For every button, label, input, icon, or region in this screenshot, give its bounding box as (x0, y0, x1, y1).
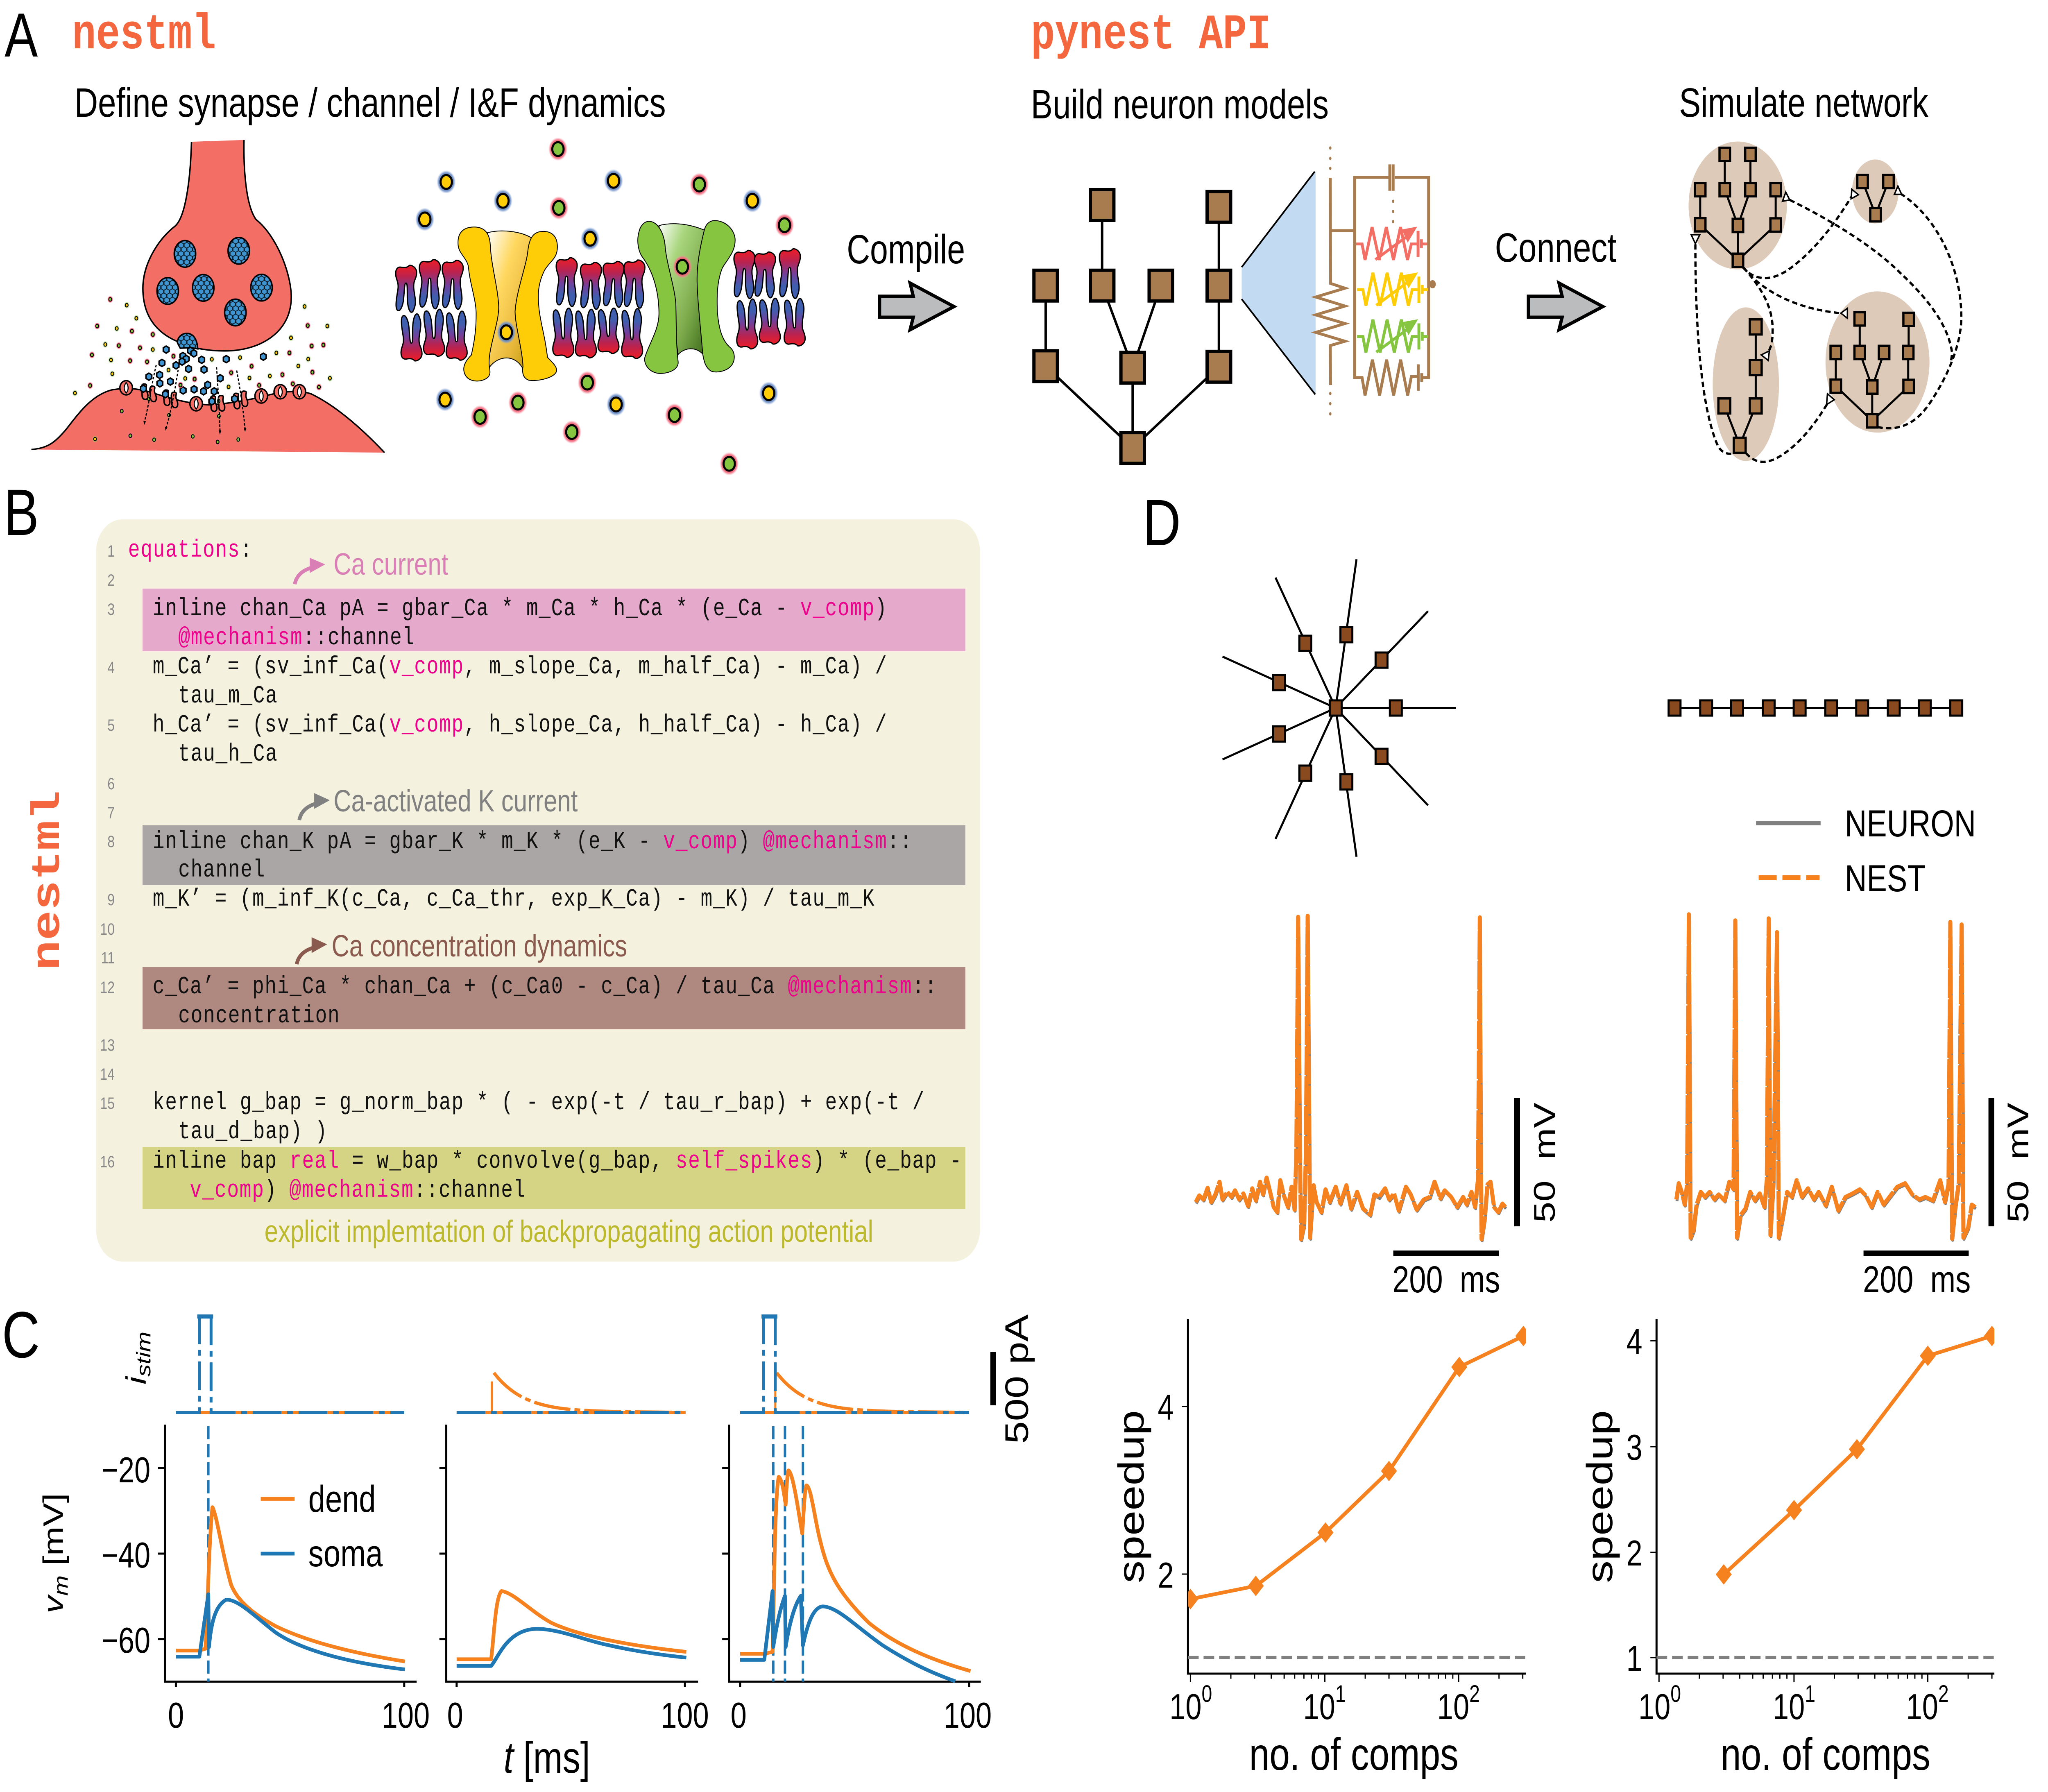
speedup chart: star morphology: 10 (1437, 1686, 1469, 1727)
scale bars: left trace: 200 ms (1392, 1258, 1500, 1300)
illustration: ion channels in membrane (396, 137, 805, 476)
panel C: stimulus traces (176, 1316, 969, 1412)
line numbers: 8 (107, 832, 115, 851)
annotation: Ca concentration dynamics: Ca concentration dynamics (332, 929, 627, 963)
line numbers: 14 (100, 1065, 115, 1083)
scale bars: left trace (1392, 1098, 1561, 1300)
heading: nestml: nestml (72, 7, 216, 64)
panel C: axis tick labels: 0 (731, 1695, 747, 1735)
speedup chart: chain morphology: 1 (1626, 1638, 1642, 1679)
speedup chart: star morphology: no. of comps (1249, 1729, 1459, 1780)
scale bars: right trace (1863, 1098, 2035, 1300)
code text: inline chan_K pA = gbar_K * m_K * (e_K - v_comp) @mechanism:: (153, 828, 912, 856)
panel: code listing (96, 519, 980, 1262)
speedup chart: chain morphology: 2 (1938, 1681, 1949, 1707)
scale bars: right trace: 200 ms (1863, 1258, 1971, 1300)
code text: inline bap real = w_bap * convolve(g_bap, self_spikes) * (e_bap - (153, 1148, 962, 1176)
scale bar: 500 pA: 500 pA (999, 1314, 1035, 1444)
code text: tau_m_Ca (178, 682, 278, 710)
compartment circuit diagram (1241, 146, 1436, 415)
line numbers: 11 (101, 949, 115, 967)
rotated label: nestml: nestml (26, 791, 71, 970)
y axis label: i_stim: i (120, 1377, 152, 1384)
subheading: define dynamics: Define synapse / channel / I&F dynamics (75, 80, 666, 126)
code text: m_K’ = (m_inf_K(c_Ca, c_Ca_thr, exp_K_Ca) - m_K) / tau_m_K (153, 886, 875, 913)
code text: kernel g_bap = g_norm_bap * ( - exp(-t / tau_r_bap) + exp(-t / (153, 1089, 925, 1117)
panel C: axis tick labels (102, 1450, 992, 1735)
code text: channel (178, 856, 265, 884)
legend: NEURON / NEST (1756, 802, 1976, 899)
speedup chart: star morphology: 2 (1158, 1555, 1174, 1595)
annotation: Ca current (295, 548, 449, 584)
panel C: axis tick labels: 0 (447, 1695, 463, 1735)
code text (128, 537, 962, 1205)
voltage trace: star morphology (1196, 916, 1506, 1241)
y axis label: v_m [mV]: v (38, 1594, 69, 1613)
subheading: build neuron models: Build neuron models (1031, 82, 1329, 127)
speedup chart: chain morphology: 0 (1670, 1681, 1681, 1707)
panel C: voltage plots (158, 1425, 981, 1687)
heading: pynest API: pynest API (1031, 7, 1271, 64)
code text: v_comp) @mechanism::channel (190, 1177, 526, 1205)
legend: NEURON / NEST: NEST (1845, 857, 1926, 899)
speedup chart: star morphology: 10 (1169, 1686, 1201, 1727)
speedup chart: star morphology (1111, 1319, 1531, 1780)
line numbers: 7 (107, 804, 115, 822)
speedup chart: star morphology: 2 (1469, 1681, 1480, 1707)
code text: tau_d_bap) ) (178, 1118, 328, 1146)
label: connect: Connect (1495, 225, 1616, 271)
line numbers: 16 (100, 1153, 115, 1171)
scale bars: left trace: 50 mV (1528, 1103, 1561, 1223)
code text: h_Ca’ = (sv_inf_Ca(v_comp, h_slope_Ca, h_half_Ca) - h_Ca) / (153, 711, 888, 739)
y axis label: i_stim: stim (133, 1332, 155, 1377)
panel C: axis tick labels: 100 (382, 1695, 430, 1735)
line numbers (100, 542, 115, 1171)
x axis label: t [ms]: t [ms] (504, 1733, 590, 1782)
annotation: Ca-activated K current: Ca-activated K current (333, 784, 578, 818)
speedup chart: star morphology: speedup (1111, 1410, 1151, 1583)
line numbers: 13 (100, 1036, 115, 1054)
panel letter B: B (4, 476, 39, 549)
code text: @mechanism::channel (178, 624, 415, 652)
speedup chart: star morphology: 4 (1158, 1387, 1174, 1427)
speedup chart: chain morphology: speedup (1579, 1410, 1620, 1583)
panel C: axis tick labels: −40 (102, 1535, 150, 1575)
y axis label: v_m [mV]: [mV] (38, 1493, 69, 1575)
code text: m_Ca’ = (sv_inf_Ca(v_comp, m_slope_Ca, m_half_Ca) - m_Ca) / (153, 653, 888, 681)
line numbers: 4 (107, 658, 115, 677)
line numbers: 3 (107, 600, 115, 618)
line numbers: 6 (107, 775, 115, 793)
panel C: legend labels (308, 1478, 383, 1575)
line numbers: 2 (107, 571, 115, 589)
panel letter A: A (5, 0, 38, 70)
panel C: legend labels: soma (308, 1532, 383, 1575)
speedup chart: star morphology: 0 (1201, 1681, 1212, 1707)
line numbers: 5 (107, 716, 115, 734)
line numbers: 15 (100, 1094, 115, 1112)
scale bars: right trace: 50 mV (2001, 1103, 2035, 1223)
speedup chart: chain morphology: 2 (1626, 1533, 1642, 1573)
network of neurons (1688, 141, 1961, 462)
panel C: axis tick labels: 100 (661, 1695, 709, 1735)
speedup chart: chain morphology: 4 (1626, 1321, 1642, 1362)
panel letter C: C (2, 1298, 40, 1371)
speedup chart: star morphology: 10 (1303, 1686, 1335, 1727)
panel letter D: D (1143, 486, 1181, 559)
annotation: Ca current: Ca current (333, 548, 449, 582)
subheading: simulate network: Simulate network (1679, 80, 1929, 126)
morphology: star (1223, 559, 1456, 857)
label: compile: Compile (847, 227, 965, 272)
y axis label: v_m [mV]: m (50, 1575, 72, 1596)
panel C: axis tick labels: 0 (168, 1695, 184, 1735)
speedup chart: chain morphology: 10 (1773, 1686, 1805, 1727)
speedup chart: chain morphology: 10 (1638, 1686, 1670, 1727)
annotation: backpropagating action potential: explicit implemtation of backpropagating action potential (265, 1215, 873, 1249)
line numbers: 9 (107, 890, 115, 909)
morphology: chain (1669, 700, 1962, 716)
panel C: axis tick labels: −20 (102, 1450, 150, 1490)
speedup chart: chain morphology (1579, 1319, 2000, 1780)
speedup chart: chain morphology: 10 (1906, 1686, 1938, 1727)
panel C: legend labels: dend (308, 1478, 376, 1520)
speedup chart: chain morphology: no. of comps (1721, 1729, 1930, 1780)
code text: equations: (128, 537, 253, 564)
line numbers: 12 (100, 978, 115, 997)
panel C: axis tick labels: −60 (102, 1620, 150, 1661)
code text: inline chan_Ca pA = gbar_Ca * m_Ca * h_Ca * (e_Ca - v_comp) (153, 595, 888, 623)
line numbers: 10 (100, 920, 115, 938)
arrow: connect (1529, 283, 1603, 330)
panel C: axis tick labels: 100 (944, 1695, 992, 1735)
arrow: compile (879, 283, 954, 330)
speedup chart: chain morphology: 3 (1626, 1427, 1642, 1468)
speedup chart: star morphology: 1 (1335, 1681, 1346, 1707)
neuron morphology tree (1034, 190, 1230, 463)
illustration: synapse (32, 140, 385, 453)
speedup chart: chain morphology: 1 (1805, 1681, 1815, 1707)
voltage trace: chain morphology (1676, 914, 1976, 1240)
legend: NEURON / NEST: NEURON (1845, 802, 1976, 845)
code text: tau_h_Ca (178, 741, 278, 768)
code text: concentration (178, 1002, 340, 1030)
code text: c_Ca’ = phi_Ca * chan_Ca + (c_Ca0 - c_Ca) / tau_Ca @mechanism:: (153, 973, 937, 1001)
line numbers: 1 (107, 542, 115, 560)
